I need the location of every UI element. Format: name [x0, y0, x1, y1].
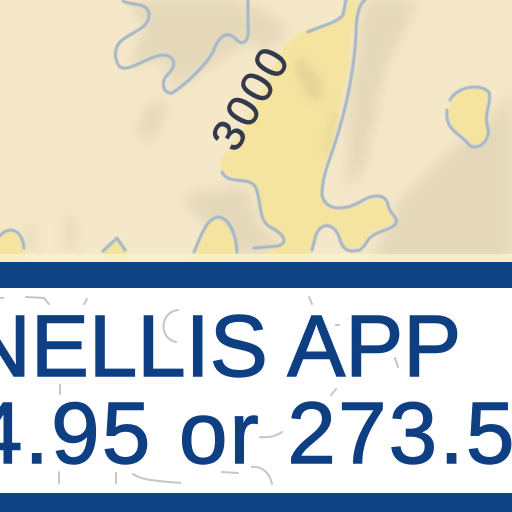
- yellow lowland area: [220, 0, 396, 262]
- yellow area shading: [295, 55, 340, 160]
- pale strip above banner: [0, 254, 512, 262]
- contour lines: [0, 0, 490, 252]
- map background: [0, 0, 512, 262]
- yellow hill at right: [449, 87, 489, 144]
- faint contour remnants behind text: [0, 297, 398, 484]
- small yellow hills along the lower edge: [0, 220, 236, 262]
- contour label: 3000: 3000: [200, 36, 301, 159]
- banner panel: [0, 288, 512, 493]
- terrain shading: [25, 0, 512, 262]
- banner frame: [0, 262, 512, 512]
